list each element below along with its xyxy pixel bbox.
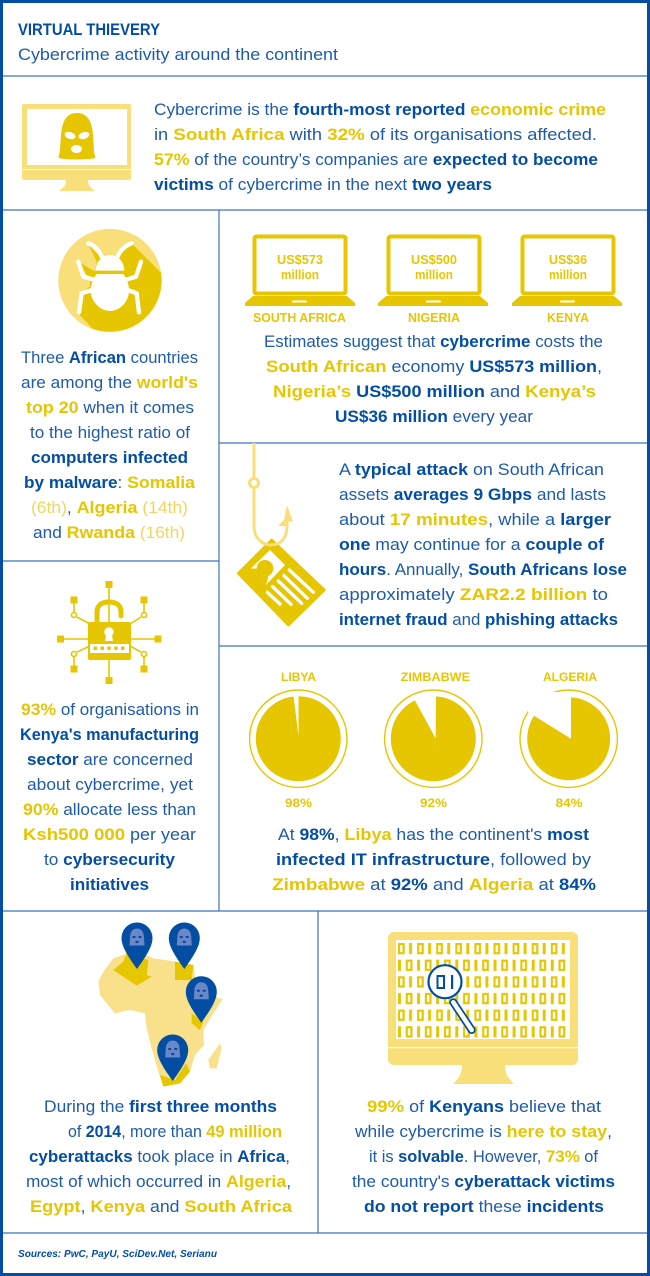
phishing text: assets averages 9 Gbps and lasts	[339, 486, 606, 504]
malware text	[21, 349, 198, 542]
pie chart: Libya	[250, 670, 347, 810]
country labels: KENYA	[547, 310, 590, 325]
attacks text: During the first three months	[44, 1098, 277, 1116]
panel: Kenyan victims	[352, 932, 615, 1216]
malware text: and Rwanda (16th)	[33, 523, 185, 542]
intro text: 57% of the country’s companies are expected to become	[154, 150, 598, 169]
panel: infected infrastructure	[250, 670, 617, 894]
icon: laptop Nigeria	[378, 236, 488, 306]
phishing text	[339, 461, 627, 629]
subtitle: Cybercrime activity around the continent	[18, 46, 338, 64]
panel: manufacturing in Kenya	[20, 581, 199, 894]
icon: laptop Kenya: US$36	[549, 252, 587, 267]
infrastructure text	[272, 825, 596, 894]
icon: monitor with binary and magnifier	[388, 932, 578, 1084]
malware text: are among the world's	[21, 373, 198, 392]
infrastructure text: infected IT infrastructure , followed by	[276, 851, 592, 869]
cost text: US$36 million every year	[335, 408, 534, 426]
Kenya manufacturing text: to cybersecurity	[44, 851, 176, 869]
title: VIRTUAL THIEVERY	[18, 20, 161, 39]
phishing text: approximately ZAR2.2 billion to	[339, 585, 608, 604]
victims text: while cybercrime is here to stay ,	[354, 1122, 612, 1141]
victims text	[352, 1097, 615, 1216]
pie chart: Libya: LIBYA	[281, 670, 316, 684]
icon: bug	[58, 229, 167, 338]
panel: intro	[22, 100, 606, 194]
Kenya manufacturing text: Ksh500 000 per year	[23, 825, 197, 844]
cost text: South African economy US$573 million ,	[266, 357, 602, 376]
map of Africa with pins	[98, 922, 223, 1087]
attacks text: of 2014, more than 49 million	[68, 1122, 282, 1141]
malware text: top 20 when it comes	[26, 398, 194, 417]
intro text	[154, 100, 606, 194]
Kenya manufacturing text: 90% allocate less than	[23, 800, 196, 819]
Kenya manufacturing text: Kenya's manufacturing	[20, 726, 199, 744]
phishing text: A typical attack on South African	[339, 461, 604, 479]
attacks text: Egypt, Kenya and South Africa	[30, 1197, 293, 1216]
country labels: SOUTH AFRICA	[253, 310, 347, 325]
intro text: victims of cybercrime in the next two years	[154, 176, 492, 194]
malware text: computers infected	[31, 449, 188, 467]
phishing text: hours. Annually, South Africans lose	[339, 561, 627, 579]
icon: laptop Kenya	[512, 236, 622, 306]
cost text: Estimates suggest that cybercrime costs the	[264, 333, 603, 351]
pie chart: Zimbabwe: ZIMBABWE	[401, 670, 470, 684]
Kenya manufacturing text: about cybercrime, yet	[27, 776, 193, 794]
phishing text: about 17 minutes , while a larger	[339, 510, 612, 529]
icon: laptop Kenya: million	[549, 267, 587, 282]
malware text: to the highest ratio of	[30, 424, 190, 442]
cost text: Nigeria’s US$500 million and Kenya’s	[273, 382, 596, 401]
icon: laptop South Africa: US$573	[277, 252, 323, 267]
panel: cost by country	[245, 236, 622, 426]
intro text: Cybercrime is the fourth-most reported economic crime	[154, 100, 606, 119]
panel: header	[18, 20, 338, 64]
icon: monitor with balaclava	[22, 104, 131, 191]
attacks text: cyberattacks took place in Africa,	[29, 1148, 290, 1166]
victims text: 99% of Kenyans believe that	[367, 1097, 601, 1116]
cost text	[264, 333, 603, 426]
infrastructure text: Zimbabwe at 92% and Algeria at 84%	[272, 875, 596, 894]
malware text: (6th), Algeria (14th)	[31, 498, 188, 517]
icon: laptop Nigeria: million	[415, 267, 453, 282]
Kenya manufacturing text: 93% of organisations in	[21, 700, 199, 719]
pie chart: Zimbabwe: 92%	[420, 796, 447, 810]
country labels: NIGERIA	[408, 310, 461, 325]
icon: network padlock	[57, 581, 162, 684]
Kenya manufacturing text: initiatives	[70, 876, 149, 894]
panel: malware	[21, 229, 198, 542]
malware text: by malware: Somalia	[24, 473, 196, 492]
country labels	[253, 310, 590, 325]
pie chart: Zimbabwe	[385, 670, 482, 810]
icon: laptop South Africa: million	[281, 267, 319, 282]
panel: attacks in Africa	[26, 922, 293, 1216]
Kenya manufacturing text	[20, 700, 199, 894]
Kenya manufacturing text: sector are concerned	[27, 751, 193, 769]
pie chart: Algeria: 84%	[556, 796, 583, 810]
victims text: it is solvable. However, 73% of	[369, 1147, 598, 1166]
attacks text	[26, 1098, 293, 1216]
icon: hook with ID card	[238, 443, 324, 625]
victims text: do not report these incidents	[364, 1198, 604, 1216]
malware text: Three African countries	[21, 349, 198, 367]
victims text: the country's cyberattack victims	[352, 1173, 615, 1191]
icon: laptop Nigeria: US$500	[411, 252, 457, 267]
panel: phishing	[238, 443, 627, 629]
pie chart: Algeria: ALGERIA	[543, 670, 597, 684]
intro text: in South Africa with 32% of its organisations affected.	[154, 125, 597, 144]
pie chart: Algeria	[520, 670, 617, 810]
sources: Sources: PwC, PayU, SciDev.Net, Serianu	[18, 1248, 218, 1260]
icon: laptop South Africa	[245, 236, 355, 306]
pie chart: Libya: 98%	[285, 796, 312, 810]
attacks text: most of which occurred in Algeria,	[26, 1172, 291, 1191]
infrastructure text: At 98%, Libya has the continent's most	[278, 825, 590, 844]
phishing text: internet fraud and phishing attacks	[339, 611, 618, 629]
phishing text: one may continue for a couple of	[339, 536, 605, 554]
